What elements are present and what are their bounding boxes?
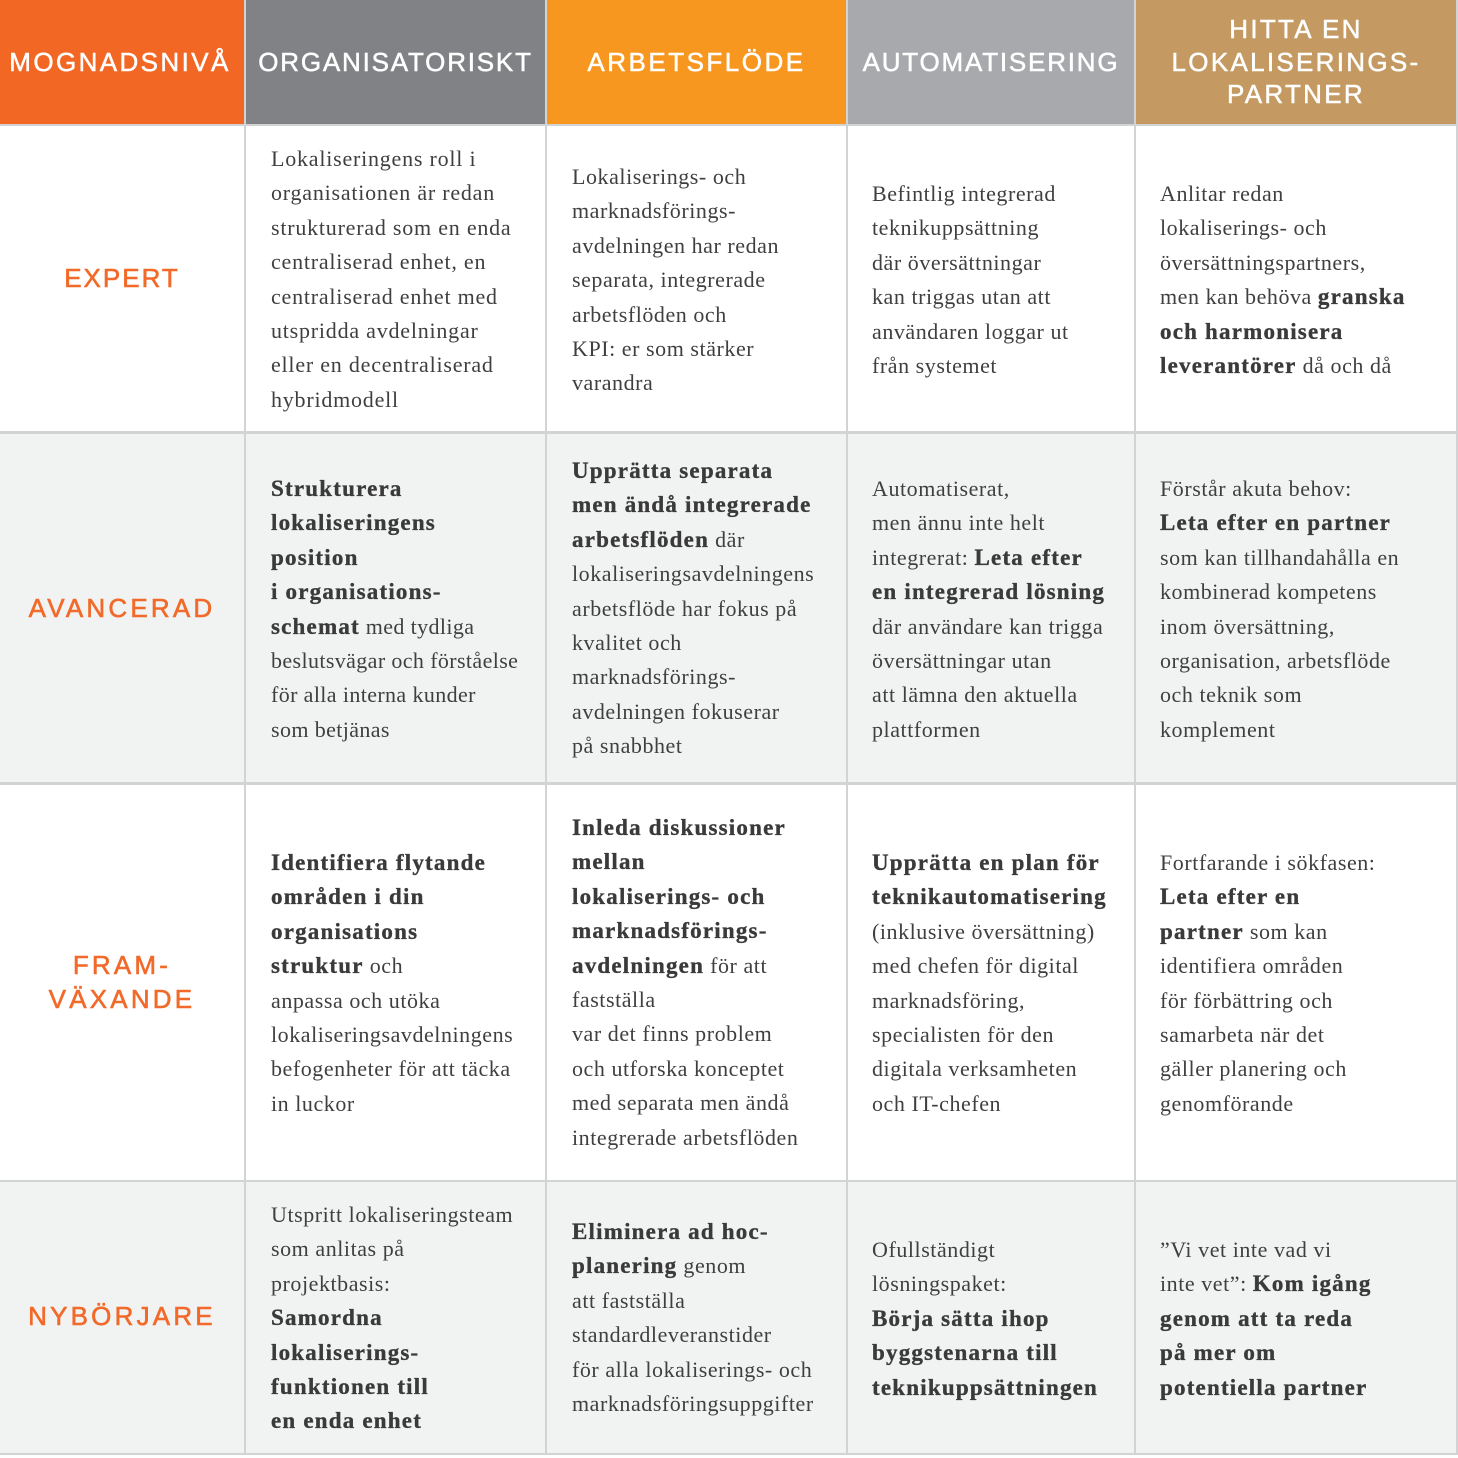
- beginner: automation text: lösningspaket:: [872, 1271, 1007, 1296]
- advanced: automation text: att lämna den aktuella: [872, 682, 1078, 707]
- advanced: workflow text: arbetsflöden där: [572, 527, 745, 552]
- advanced: automation text: men ännu inte helt: [872, 510, 1045, 535]
- advanced: automation text: integrerat: Leta efter: [872, 545, 1083, 570]
- advanced: partner text: komplement: [1160, 717, 1275, 742]
- expert: partner text: men kan behöva granska: [1160, 284, 1406, 309]
- beginner: organizational text: funktionen till: [271, 1374, 429, 1399]
- advanced: organizational text: [271, 476, 518, 742]
- emerging: partner text: [1160, 850, 1375, 1116]
- advanced: automation text: där användare kan trigga: [872, 614, 1103, 639]
- row label: emerging: FRAM-: [73, 950, 171, 980]
- emerging: workflow text: avdelningen för att: [572, 953, 767, 978]
- emerging: partner text: Fortfarande i sökfasen:: [1160, 850, 1375, 875]
- header: workflow: [547, 0, 846, 124]
- beginner: organizational text: Utspritt lokaliseringsteam: [271, 1202, 513, 1227]
- beginner: automation text: teknikuppsättningen: [872, 1375, 1098, 1400]
- expert: partner text: och harmonisera: [1160, 319, 1343, 344]
- emerging: partner text: gäller planering och: [1160, 1056, 1347, 1081]
- beginner: partner text: på mer om: [1160, 1340, 1276, 1365]
- expert: organizational text: hybridmodell: [271, 387, 399, 412]
- advanced: partner text: kombinerad kompetens: [1160, 579, 1377, 604]
- beginner: partner text: ”Vi vet inte vad vi: [1160, 1237, 1332, 1262]
- beginner: organizational text: en enda enhet: [271, 1408, 422, 1433]
- advanced: workflow text: marknadsförings-: [572, 664, 736, 689]
- advanced: workflow text: på snabbhet: [572, 733, 683, 758]
- emerging: partner text: samarbeta när det: [1160, 1022, 1324, 1047]
- emerging: workflow text: integrerade arbetsflöden: [572, 1125, 798, 1150]
- beginner: workflow text: Eliminera ad hoc-: [572, 1219, 769, 1244]
- expert: automation text: teknikuppsättning: [872, 215, 1039, 240]
- expert: workflow text: varandra: [572, 370, 653, 395]
- beginner: partner text: potentiella partner: [1160, 1375, 1367, 1400]
- beginner: workflow text: [572, 1219, 814, 1416]
- expert: organizational text: strukturerad som en enda: [271, 215, 511, 240]
- emerging: organizational text: anpassa och utöka: [271, 988, 440, 1013]
- advanced: organizational text: i organisations-: [271, 579, 442, 604]
- row label: beginner: NYBÖRJARE: [28, 1301, 216, 1331]
- emerging: automation text: (inklusive översättning): [872, 919, 1095, 944]
- expert: workflow text: avdelningen har redan: [572, 233, 779, 258]
- beginner: workflow text: standardleveranstider: [572, 1322, 772, 1347]
- advanced: partner text: Leta efter en partner: [1160, 510, 1391, 535]
- advanced: automation text: [872, 476, 1105, 742]
- advanced: workflow text: men ändå integrerade: [572, 492, 812, 517]
- advanced: automation text: plattformen: [872, 717, 981, 742]
- beginner: organizational text: som anlitas på: [271, 1236, 405, 1261]
- emerging: workflow text: lokaliserings- och: [572, 884, 765, 909]
- emerging: automation text: teknikautomatisering: [872, 884, 1107, 909]
- emerging: workflow text: marknadsförings-: [572, 918, 768, 943]
- advanced: partner text: Förstår akuta behov:: [1160, 476, 1352, 501]
- beginner: organizational text: lokaliserings-: [271, 1340, 419, 1365]
- emerging: organizational text: in luckor: [271, 1091, 355, 1116]
- advanced: partner text: [1160, 476, 1399, 742]
- beginner: workflow text: marknadsföringsuppgifter: [572, 1391, 814, 1416]
- beginner: partner text: genom att ta reda: [1160, 1306, 1353, 1331]
- expert: organizational text: centraliserad enhet, en: [271, 249, 486, 274]
- header: workflow: ARBETSFLÖDE: [587, 47, 806, 77]
- emerging: automation text: [872, 850, 1107, 1116]
- emerging: automation text: digitala verksamheten: [872, 1056, 1077, 1081]
- emerging: automation text: specialisten för den: [872, 1022, 1054, 1047]
- emerging: automation text: med chefen för digital: [872, 953, 1079, 978]
- expert: partner text: [1160, 181, 1406, 378]
- beginner: partner text: inte vet”: Kom igång: [1160, 1271, 1372, 1296]
- emerging: workflow text: med separata men ändå: [572, 1090, 789, 1115]
- advanced: organizational text: som betjänas: [271, 717, 390, 742]
- advanced: workflow text: arbetsflöde har fokus på: [572, 596, 797, 621]
- emerging: workflow text: mellan: [572, 849, 646, 874]
- emerging: partner text: genomförande: [1160, 1091, 1294, 1116]
- emerging: automation text: Upprätta en plan för: [872, 850, 1100, 875]
- emerging: organizational text: [271, 850, 513, 1116]
- advanced: partner text: organisation, arbetsflöde: [1160, 648, 1391, 673]
- advanced: organizational text: beslutsvägar och förståelse: [271, 648, 518, 673]
- expert: organizational text: organisationen är redan: [271, 180, 495, 205]
- header: find a localization partner: LOKALISERINGS-: [1172, 47, 1420, 77]
- advanced: organizational text: Strukturera: [271, 476, 403, 501]
- advanced: workflow text: lokaliseringsavdelningens: [572, 561, 814, 586]
- expert: automation text: användaren loggar ut: [872, 319, 1069, 344]
- advanced: organizational text: lokaliseringens: [271, 510, 436, 535]
- header: automation: AUTOMATISERING: [863, 47, 1119, 77]
- beginner: workflow text: att fastställa: [572, 1288, 685, 1313]
- emerging: organizational text: organisations: [271, 919, 418, 944]
- expert: automation text: Befintlig integrerad: [872, 181, 1056, 206]
- beginner: organizational text: Samordna: [271, 1305, 383, 1330]
- expert: partner text: lokaliserings- och: [1160, 215, 1327, 240]
- emerging: organizational text: befogenheter för att täcka: [271, 1056, 511, 1081]
- advanced: organizational text: för alla interna kunder: [271, 682, 476, 707]
- advanced: organizational text: schemat med tydliga: [271, 614, 474, 639]
- advanced: partner text: och teknik som: [1160, 682, 1302, 707]
- emerging: partner text: identifiera områden: [1160, 953, 1343, 978]
- emerging: partner text: för förbättring och: [1160, 988, 1333, 1013]
- emerging: automation text: marknadsföring,: [872, 988, 1025, 1013]
- emerging: organizational text: lokaliseringsavdelningens: [271, 1022, 513, 1047]
- emerging: workflow text: fastställa: [572, 987, 656, 1012]
- header: organizational: ORGANISATORISKT: [258, 47, 533, 77]
- expert: organizational text: centraliserad enhet med: [271, 284, 498, 309]
- advanced: workflow text: Upprätta separata: [572, 458, 773, 483]
- expert: workflow text: marknadsförings-: [572, 198, 736, 223]
- header: maturity level: MOGNADSNIVÅ: [9, 47, 231, 77]
- expert: workflow text: separata, integrerade: [572, 267, 766, 292]
- advanced: automation text: översättningar utan: [872, 648, 1052, 673]
- expert: organizational text: [271, 146, 511, 412]
- advanced: workflow text: avdelningen fokuserar: [572, 699, 780, 724]
- advanced: automation text: Automatiserat,: [872, 476, 1010, 501]
- expert: workflow text: KPI: er som stärker: [572, 336, 754, 361]
- expert: workflow text: arbetsflöden och: [572, 302, 727, 327]
- emerging: organizational text: struktur och: [271, 953, 403, 978]
- beginner: automation text: [872, 1237, 1098, 1400]
- row label: advanced: AVANCERAD: [29, 593, 215, 623]
- emerging: partner text: partner som kan: [1160, 919, 1328, 944]
- emerging: workflow text: var det finns problem: [572, 1021, 772, 1046]
- emerging: organizational text: Identifiera flytande: [271, 850, 486, 875]
- beginner: partner text: [1160, 1237, 1372, 1400]
- advanced: organizational text: position: [271, 545, 359, 570]
- beginner: workflow text: planering genom: [572, 1253, 746, 1278]
- advanced: workflow text: [572, 458, 814, 758]
- row label: expert: EXPERT: [64, 263, 180, 293]
- expert: automation text: från systemet: [872, 353, 997, 378]
- emerging: workflow text: [572, 815, 798, 1150]
- expert: organizational text: eller en decentraliserad: [271, 352, 494, 377]
- header: organizational: [246, 0, 545, 124]
- emerging: workflow text: Inleda diskussioner: [572, 815, 786, 840]
- beginner: organizational text: projektbasis:: [271, 1271, 391, 1296]
- emerging: workflow text: och utforska konceptet: [572, 1056, 784, 1081]
- expert: automation text: kan triggas utan att: [872, 284, 1051, 309]
- beginner: organizational text: [271, 1202, 513, 1433]
- advanced: partner text: som kan tillhandahålla en: [1160, 545, 1399, 570]
- expert: partner text: Anlitar redan: [1160, 181, 1284, 206]
- expert: organizational text: Lokaliseringens roll i: [271, 146, 476, 171]
- expert: automation text: [872, 181, 1069, 378]
- emerging: automation text: och IT-chefen: [872, 1091, 1001, 1116]
- emerging: partner text: Leta efter en: [1160, 884, 1300, 909]
- emerging: organizational text: områden i din: [271, 884, 425, 909]
- expert: organizational text: utspridda avdelningar: [271, 318, 479, 343]
- header: find a localization partner: HITTA EN: [1229, 14, 1363, 44]
- header: find a localization partner: [1136, 0, 1456, 124]
- beginner: automation text: Ofullständigt: [872, 1237, 995, 1262]
- expert: workflow text: [572, 164, 779, 395]
- expert: partner text: översättningspartners,: [1160, 250, 1366, 275]
- advanced: partner text: inom översättning,: [1160, 614, 1335, 639]
- row label: emerging: VÄXANDE: [49, 984, 195, 1014]
- expert: workflow text: Lokaliserings- och: [572, 164, 746, 189]
- header: find a localization partner: PARTNER: [1227, 79, 1365, 109]
- beginner: workflow text: för alla lokaliserings- och: [572, 1357, 812, 1382]
- expert: partner text: leverantörer då och då: [1160, 353, 1392, 378]
- row label: emerging: [48, 950, 195, 1014]
- header: maturity level: [0, 0, 244, 124]
- expert: automation text: där översättningar: [872, 250, 1041, 275]
- advanced: workflow text: kvalitet och: [572, 630, 682, 655]
- advanced: automation text: en integrerad lösning: [872, 579, 1105, 604]
- beginner: automation text: Börja sätta ihop: [872, 1306, 1050, 1331]
- beginner: automation text: byggstenarna till: [872, 1340, 1058, 1365]
- header: automation: [848, 0, 1134, 124]
